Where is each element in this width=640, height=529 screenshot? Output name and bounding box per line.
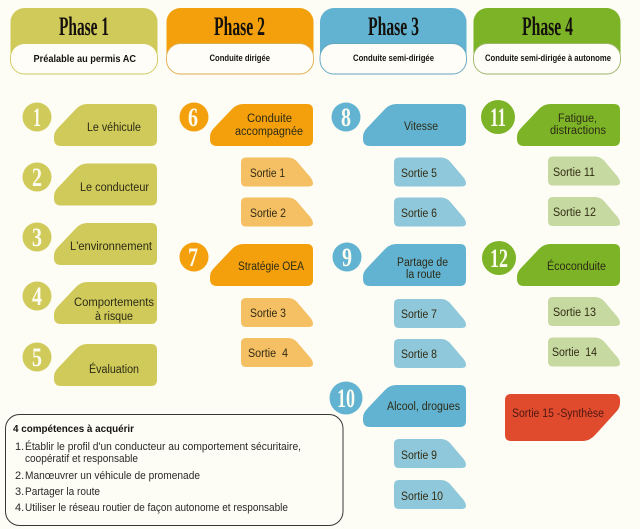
Sortie 8 <box>394 339 466 368</box>
topic 2: Le conducteur <box>22 162 157 206</box>
topic 8: Vitesse: 8 <box>341 102 351 132</box>
topic 6: Conduite accompagnée: Conduite <box>247 113 292 125</box>
Sortie 6 <box>394 198 466 226</box>
column: Phase 3 topics <box>330 102 466 509</box>
Sortie 3: Sortie 3 <box>250 308 286 320</box>
Sortie 5 <box>394 158 466 186</box>
header: Phase 2 <box>166 8 314 74</box>
topic 4: Comportements à risque <box>22 281 157 324</box>
Sortie 7: Sortie 7 <box>401 309 437 321</box>
topic 11: Fatigue, distractions <box>481 100 620 146</box>
topic 4: Comportements à risque: Comportements <box>74 297 154 309</box>
topic 8: Vitesse <box>332 102 466 146</box>
Sortie 1: Sortie 1 <box>250 168 285 180</box>
topic 9: Partage de la route: Partage de <box>397 257 448 269</box>
topic 8: Vitesse: Vitesse <box>404 121 438 133</box>
Sortie 12 <box>548 197 620 226</box>
topic 4: Comportements à risque: à risque <box>95 311 133 323</box>
Sortie 2: Sortie 2 <box>250 208 286 220</box>
header: Phase 1 <box>10 8 158 74</box>
competence list <box>15 440 301 514</box>
topic 10: Alcool, drogues <box>330 382 466 427</box>
panel: 4 compétences à acquérir <box>6 414 343 526</box>
topic 9: Partage de la route <box>332 242 466 286</box>
Sortie 14 <box>548 338 620 366</box>
topic 7: Stratégie OEA: Stratégie OEA <box>238 261 304 273</box>
competence list: Établir le profil d'un conducteur au comportement sécuritaire, <box>25 440 301 453</box>
Sortie 10: Sortie 10 <box>401 491 443 503</box>
Sortie 7 <box>394 299 466 328</box>
header: Phase 3: Conduite semi-dirigée <box>353 53 434 63</box>
topic 3: L'environnement <box>22 222 157 265</box>
header: Phase 2: Conduite dirigée <box>210 53 270 63</box>
topic 3: L'environnement: 3 <box>32 222 42 252</box>
competence list: 2. <box>15 470 24 482</box>
header: Phase 4 <box>474 8 620 74</box>
header: Phase 4: Conduite semi-dirigée à autonome <box>485 53 611 63</box>
topic 6: Conduite accompagnée <box>180 102 313 146</box>
Sortie 5: Sortie 5 <box>401 168 437 180</box>
topic 3: L'environnement: L'environnement <box>70 241 153 253</box>
topic 11: Fatigue, distractions: 11 <box>490 102 506 132</box>
header: Phase 2: Phase 2 <box>214 12 265 41</box>
topic 12: Écoconduite <box>482 241 620 286</box>
header: Phase 1: Phase 1 <box>59 12 109 41</box>
Sortie 11 <box>548 156 620 186</box>
topic 7: Stratégie OEA <box>180 242 313 286</box>
competence list: Partager la route <box>25 486 100 498</box>
header: Phase 3: Phase 3 <box>368 12 419 41</box>
Sortie 9 <box>394 439 466 468</box>
Sortie 13 <box>548 297 620 326</box>
Sortie 14: Sortie 14 <box>552 347 598 359</box>
Sortie 4: Sortie 4 <box>248 348 289 360</box>
Sortie 10 <box>394 480 466 509</box>
panel heading: 4 compétences à acquérir <box>13 423 134 435</box>
header: Phase 3 <box>320 8 466 74</box>
Sortie 15 synthèse <box>505 394 620 441</box>
Sortie 8: Sortie 8 <box>401 349 437 361</box>
column: Phase 1 topics <box>22 102 157 386</box>
topic 7: Stratégie OEA: 7 <box>188 242 198 272</box>
topic 6: Conduite accompagnée: accompagnée <box>235 126 303 138</box>
Sortie 11: Sortie 11 <box>553 167 595 179</box>
competence list: Manœuvrer un véhicule de promenade <box>25 470 200 482</box>
Sortie 1 <box>241 158 313 186</box>
column: Phase 2 topics <box>180 102 313 367</box>
topic 10: Alcool, drogues: Alcool, drogues <box>387 401 460 413</box>
topic 2: Le conducteur: Le conducteur <box>80 182 149 194</box>
topic 4: Comportements à risque: 4 <box>32 281 42 311</box>
Sortie 3 <box>241 298 313 327</box>
topic 12: Écoconduite: 12 <box>490 243 508 273</box>
column: Phase 4 topics <box>481 100 620 441</box>
topic 5: Évaluation: Évaluation <box>89 363 139 376</box>
Sortie 9: Sortie 9 <box>401 450 437 462</box>
Sortie 4 <box>241 338 313 367</box>
Sortie 6: Sortie 6 <box>401 208 437 220</box>
competence list: 1. <box>15 441 24 453</box>
topic 5: Évaluation <box>22 342 157 386</box>
topic 10: Alcool, drogues: 10 <box>337 383 355 413</box>
Sortie 12: Sortie 12 <box>553 207 596 219</box>
topic 2: Le conducteur: 2 <box>32 162 42 192</box>
competence list: 4. <box>15 502 24 514</box>
Sortie 13: Sortie 13 <box>553 307 596 319</box>
topic 6: Conduite accompagnée: 6 <box>188 102 198 132</box>
competence list: 3. <box>15 486 24 498</box>
topic 1: Le véhicule: 1 <box>33 102 41 132</box>
topic 12: Écoconduite: Écoconduite <box>547 260 606 273</box>
competence list: Utiliser le réseau routier de façon autonome et responsable <box>25 502 288 514</box>
header: Phase 1: Préalable au permis AC <box>34 54 136 65</box>
header: Phase 4: Phase 4 <box>522 12 573 41</box>
topic 11: Fatigue, distractions: Fatigue, <box>558 113 597 125</box>
Sortie 15 synthèse: Sortie 15 -Synthèse <box>512 408 604 420</box>
topic 11: Fatigue, distractions: distractions <box>550 125 606 137</box>
Sortie 2 <box>241 198 313 226</box>
topic 9: Partage de la route: 9 <box>342 242 352 272</box>
competence list: coopératif et responsable <box>25 453 138 465</box>
topic 1: Le véhicule: Le véhicule <box>87 122 141 134</box>
topic 1: Le véhicule <box>22 102 157 146</box>
topic 5: Évaluation: 5 <box>32 342 42 372</box>
topic 9: Partage de la route: la route <box>406 269 441 281</box>
